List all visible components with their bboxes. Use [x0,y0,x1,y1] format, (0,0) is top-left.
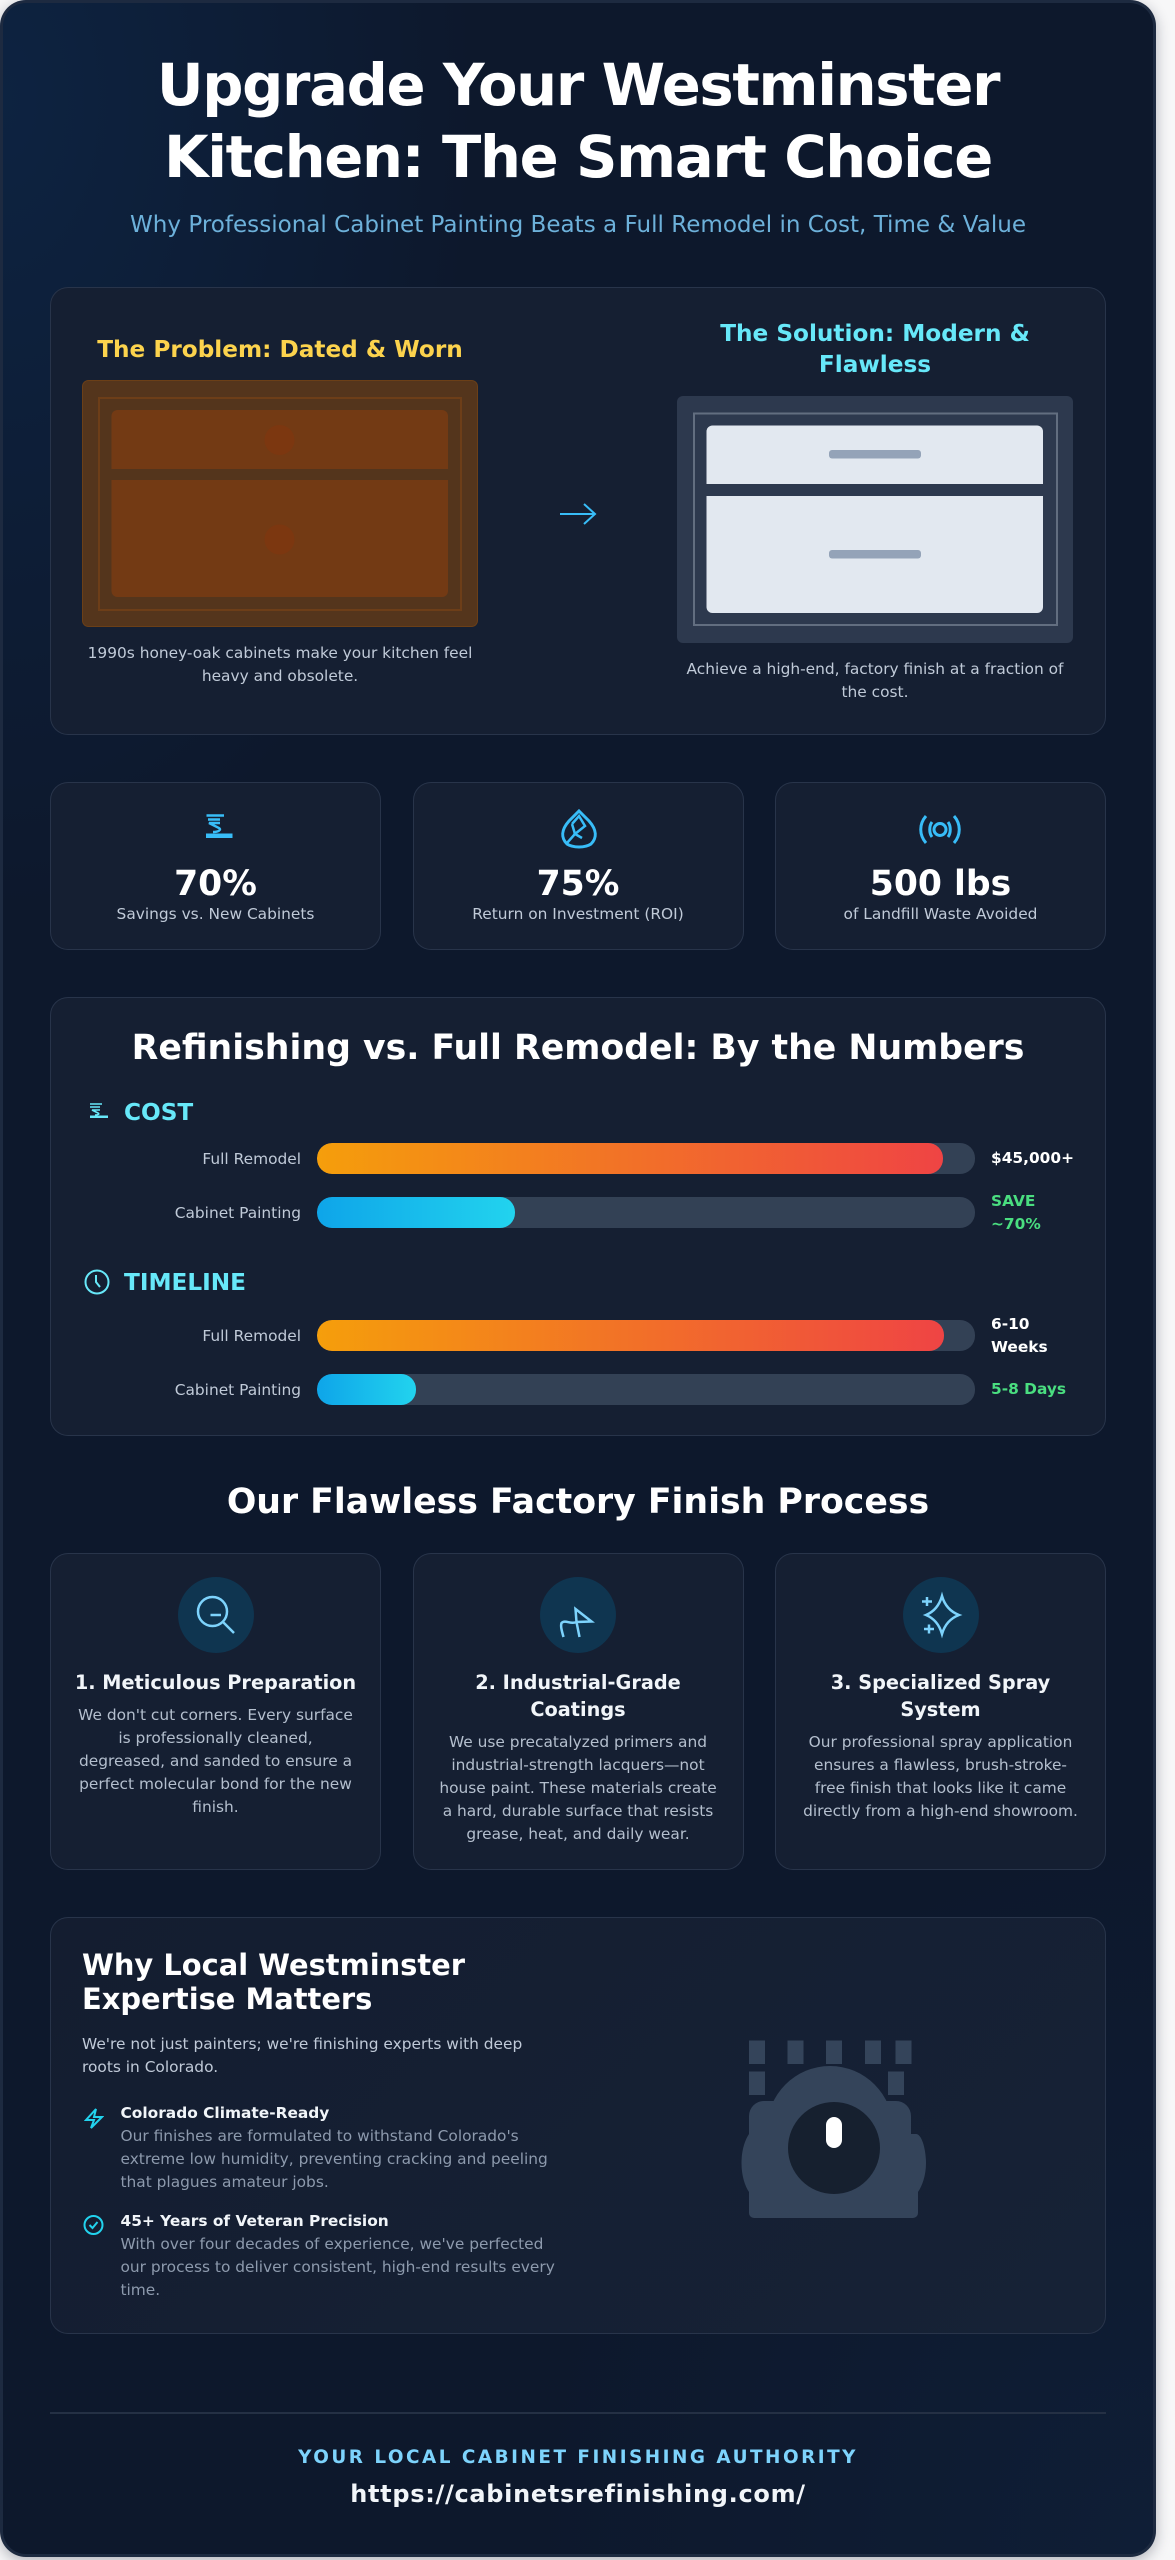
feature text [120,2127,548,2191]
caption: the problem: 1990s honey-oak cabinets make your kitchen feel [88,644,472,662]
feature: climate ready [84,2104,548,2191]
stat label: Return on Investment (ROI) [472,904,684,922]
icon: droplet [561,809,597,848]
title: Upgrade Your Westminster [157,52,999,119]
bar: full remodel timeline: 6-10 [991,1314,1030,1332]
step text: degreased, and sanded to ensure a [79,1752,352,1770]
bar: cabinet painting timeline [175,1374,1066,1405]
step text: We use precatalyzed primers and [449,1732,707,1750]
step text: a hard, durable surface that resists [443,1802,713,1820]
process card 2: coatings [412,1553,744,1870]
panel: comparison bars [50,997,1106,1436]
step text [439,1732,717,1842]
bar: cabinet painting cost: SAVE [991,1192,1035,1210]
feature text: extreme low humidity, preventing cracking and peeling [120,2150,548,2168]
caption: the solution: Achieve a high-end, factory finish at a fraction of [687,660,1063,678]
bar: cabinet painting timeline: 5-8 Days [991,1380,1066,1398]
bar: full remodel cost: Full Remodel [202,1150,301,1168]
icon: scale [206,814,232,838]
bar: full remodel cost: $45,000+ [991,1149,1074,1167]
feature text: time. [120,2280,160,2298]
bar: full remodel timeline: Full Remodel [202,1326,301,1344]
bar: cabinet painting timeline: Cabinet Painting [175,1380,301,1398]
step title: 3. Specialized Spray [831,1671,1050,1694]
feature text: that plagues amateur jobs. [120,2173,329,2191]
caption: the solution [686,660,1064,700]
icon: cost scale [90,1103,108,1118]
heading: local expertise: Expertise Matters [82,1982,372,2016]
step text [803,1732,1078,1820]
caption: the solution: the cost. [842,682,908,700]
label: timeline: TIMELINE [124,1268,246,1296]
step title: System [900,1698,981,1721]
heading: the solution: Flawless [819,350,931,378]
step text: industrial-strength lacquers—not [451,1756,705,1774]
stat label: Savings vs. New Cabinets [117,904,314,922]
feature text: Our finishes are formulated to withstand Colorado's [120,2127,519,2145]
website url: https://cabinetsrefinishing.com/ [350,2480,806,2508]
icon: badge check [84,2215,104,2235]
bar: full remodel cost [202,1143,1074,1174]
bar: cabinet painting cost: ~70% [991,1214,1041,1232]
step title [831,1671,1050,1721]
feature text [120,2234,555,2298]
bar: cabinet painting cost [175,1192,1041,1232]
arrow: problem to solution [560,503,596,525]
feature: veteran precision [84,2212,555,2298]
icon: broadcast rings [919,815,961,844]
intro text [82,2034,522,2076]
heading: the solution: The Solution: Modern & [720,320,1030,347]
step title [475,1671,681,1721]
illustration: dated oak cabinet [82,380,478,627]
icon: magnifier [178,1577,254,1653]
heading: the problem: The Problem: Dated & Worn [97,336,463,362]
step text: grease, heat, and daily wear. [466,1824,690,1842]
heading: local expertise [82,1948,465,2016]
feature title: Colorado Climate-Ready [120,2104,329,2122]
feature text: our process to deliver consistent, high-end results every [120,2258,555,2276]
heading: local expertise: Why Local Westminster [82,1948,465,1982]
step text: directly from a high-end showroom. [803,1802,1078,1820]
bar: full remodel timeline: Weeks [991,1338,1048,1356]
process card 3: spray system [775,1553,1106,1870]
step text: ensures a flawless, brush-stroke- [814,1756,1067,1774]
title [157,52,1000,191]
intro text: We're not just painters; we're finishing experts with deep [82,2034,522,2052]
bar: full remodel timeline [202,1314,1048,1356]
icon: paint flag [540,1577,616,1653]
intro text: roots in Colorado. [82,2058,218,2076]
stat value: 70% [174,864,257,904]
step text: is professionally cleaned, [118,1728,313,1746]
stat card: savings [50,782,381,950]
heading: the solution [720,320,1030,378]
heading: by the numbers: Refinishing vs. Full Remodel: By the Numbers [132,1028,1024,1068]
illustration: local landmark [742,2040,926,2218]
step text: free finish that looks like it came [815,1778,1066,1796]
footer [298,2447,858,2508]
heading: process: Our Flawless Factory Finish Process [227,1482,929,1522]
tagline: YOUR LOCAL CABINET FINISHING AUTHORITY [298,2447,858,2468]
step text: We don't cut corners. Every surface [78,1706,353,1724]
step title: 1. Meticulous Preparation [75,1671,356,1694]
icon: sparkles [903,1577,979,1653]
caption: the problem: heavy and obsolete. [202,667,358,685]
stat label: of Landfill Waste Avoided [844,904,1037,922]
icon: bolt [84,2108,104,2129]
stat value: 75% [537,864,619,904]
step title: Coatings [530,1698,626,1721]
step text: finish. [192,1798,239,1816]
label: cost: COST [124,1098,193,1126]
stat card: return on investment [412,782,744,950]
process card 1: preparation [50,1553,381,1870]
step text: perfect molecular bond for the new [79,1774,352,1792]
step text [78,1706,353,1816]
stat value: 500 lbs [870,864,1011,904]
title: Kitchen: The Smart Choice [164,124,992,191]
caption: the problem [88,644,472,685]
feature title: 45+ Years of Veteran Precision [120,2212,389,2230]
stat card: landfill waste [775,782,1106,950]
feature text: With over four decades of experience, we've perfected [120,2234,543,2252]
subtitle: Why Professional Cabinet Painting Beats a Full Remodel in Cost, Time & Value [130,212,1026,238]
step text: house paint. These materials create [439,1778,717,1796]
bar: cabinet painting cost: Cabinet Painting [175,1204,301,1222]
step title: 2. Industrial-Grade [475,1671,681,1694]
illustration: modern painted cabinet [677,396,1073,643]
panel: problem and solution [50,287,1106,735]
icon: clock [84,1270,110,1294]
panel: local expertise [50,1917,1106,2334]
step text: Our professional spray application [809,1732,1072,1750]
